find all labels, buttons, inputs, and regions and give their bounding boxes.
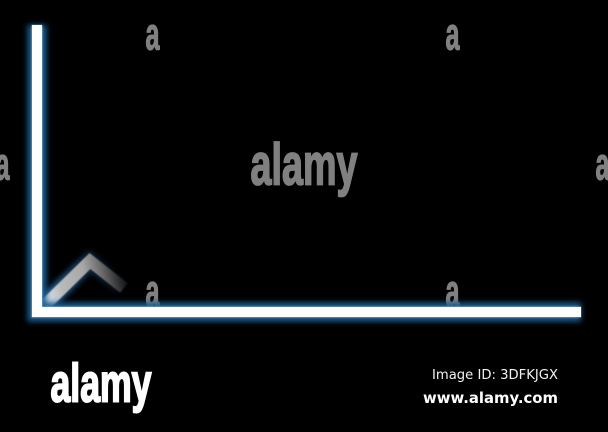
logo: alamy [50,354,152,414]
watermark: small letters [0,8,608,316]
watermark: small letters: a [146,8,160,60]
watermark: centre logo: alamy [250,132,358,198]
watermark: small letters: a [146,266,160,316]
axes [32,25,581,317]
website: www.alamy.com [423,389,558,407]
image id: Image ID: 3DFKJGX [432,367,558,383]
watermark: small letters: a [446,266,460,316]
watermark: small letters: a [446,8,460,60]
line series: rising then falling chevron [41,261,124,309]
